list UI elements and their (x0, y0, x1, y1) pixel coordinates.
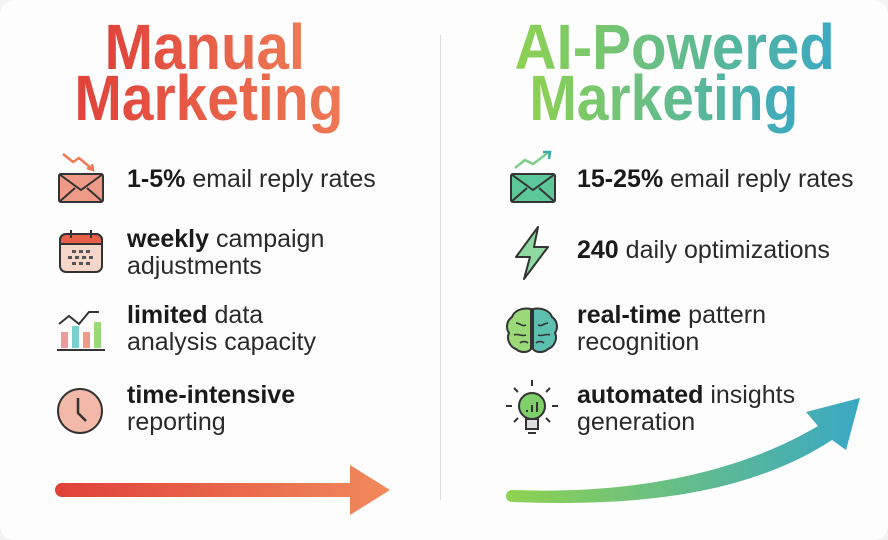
icon: lightbulb (506, 380, 558, 434)
text: real-time: real-time pattern (577, 301, 766, 329)
text: limited (127, 301, 316, 356)
text: time-intensive: reporting (127, 408, 226, 436)
text: real-time (577, 301, 766, 356)
text: limited: analysis capacity (127, 328, 316, 356)
title: ai-powered marketing: Marketing (529, 62, 798, 134)
icon: lightning (515, 226, 549, 280)
icon: email down (58, 153, 104, 203)
title: ai-powered marketing: AI-Powered (514, 11, 835, 83)
title: ai-powered marketing (514, 11, 835, 134)
text: weekly: weekly campaign (127, 225, 324, 253)
text: limited: limited data (127, 301, 263, 329)
divider (440, 35, 441, 500)
text: automated: automated insights (577, 381, 795, 409)
title: manual marketing (74, 11, 343, 134)
icon: brain (506, 308, 558, 353)
text: 240: 240 daily optimizations (577, 236, 830, 264)
arrow: manual (55, 465, 390, 515)
arrow: ai curve (506, 398, 860, 503)
icon: chart (57, 311, 105, 351)
text: weekly: adjustments (127, 252, 262, 280)
icon: clock (57, 388, 103, 434)
title: manual marketing: Manual (104, 11, 305, 83)
title: manual marketing: Marketing (74, 62, 343, 134)
text: 15-25%: 15-25% email reply rates (577, 165, 854, 193)
text: 1-5%: 1-5% email reply rates (127, 165, 376, 193)
text: time-intensive: time-intensive (127, 381, 295, 409)
text: real-time: recognition (577, 328, 699, 356)
icon: calendar (59, 230, 103, 273)
text: automated: generation (577, 408, 695, 436)
icon: email up (510, 150, 556, 203)
text: weekly (127, 225, 324, 280)
text: automated (577, 381, 795, 436)
text: time-intensive (127, 381, 295, 436)
